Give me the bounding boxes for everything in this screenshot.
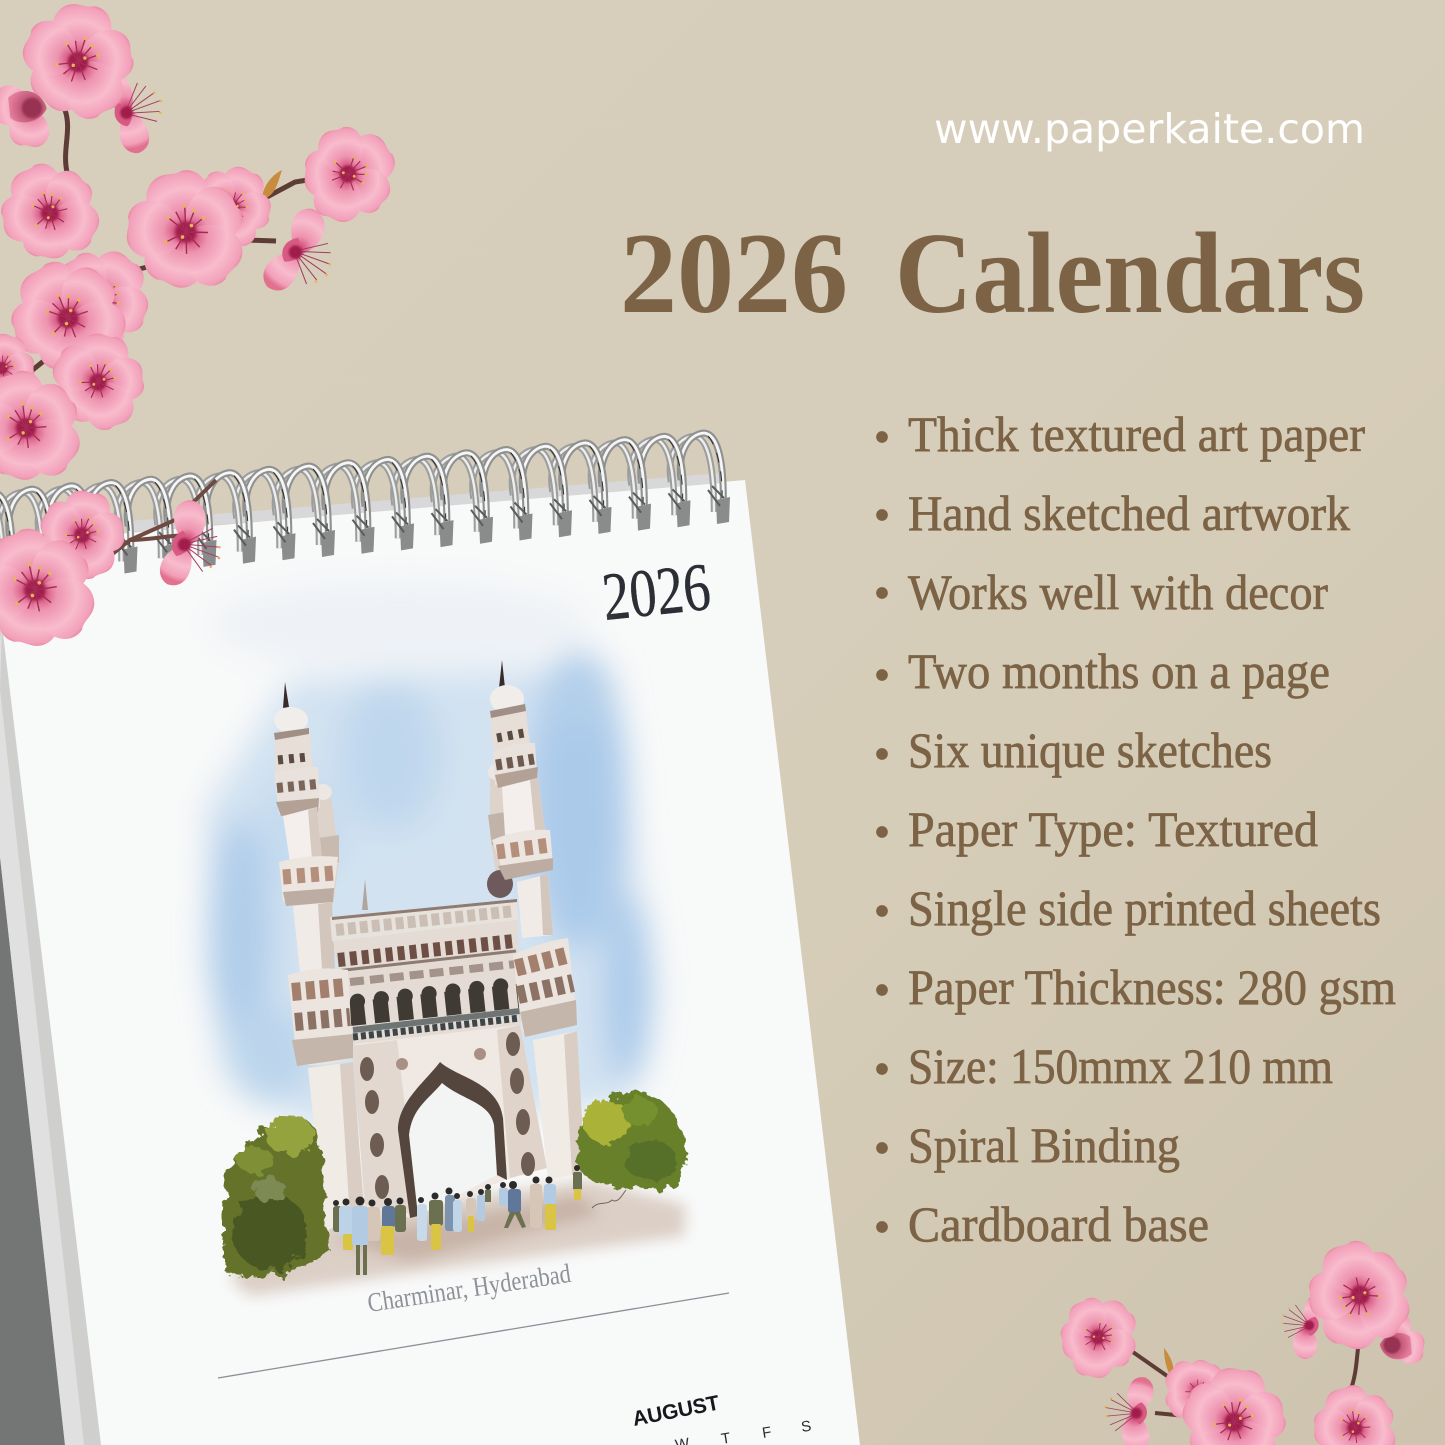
right minaret bbox=[490, 660, 553, 938]
calendar bbox=[0, 433, 860, 1445]
blossom behind bbox=[22, 226, 173, 376]
blossom far right bbox=[277, 105, 415, 243]
ground wash bbox=[228, 1180, 686, 1296]
title: Calendars bbox=[895, 210, 1365, 338]
caption rule bbox=[218, 1293, 729, 1378]
blossom lower side bbox=[1101, 1374, 1155, 1445]
calendar year: 2026 bbox=[599, 548, 714, 635]
illustration: Charminar bbox=[274, 660, 585, 1232]
blossom lower bbox=[34, 322, 159, 445]
weekday labels bbox=[674, 1418, 813, 1445]
feature: artwork: Hand sketched artwork bbox=[908, 485, 1350, 541]
crowd bbox=[333, 1165, 582, 1275]
arch frame bbox=[398, 1062, 507, 1218]
calendar page bbox=[0, 480, 860, 1445]
bud bbox=[1164, 1348, 1174, 1378]
feature: single side: Single side printed sheets bbox=[908, 880, 1381, 936]
right tower bbox=[513, 938, 585, 1180]
blossom middle bbox=[1167, 1359, 1298, 1445]
feature: decor: Works well with decor bbox=[908, 564, 1328, 620]
blossom top bbox=[1289, 1221, 1434, 1365]
person torsos and legs bbox=[333, 1172, 582, 1275]
cherry blossoms: top left branch bbox=[0, 0, 415, 503]
month heading: AUGUST bbox=[631, 1392, 722, 1431]
bud bbox=[262, 170, 282, 197]
feature: paper type: Paper Type: Textured bbox=[908, 801, 1318, 857]
blossom side right bbox=[93, 58, 178, 158]
website address: www.paperkaite.com bbox=[934, 105, 1365, 153]
small dome and finial bbox=[362, 870, 513, 910]
branch bbox=[80, 480, 216, 580]
blossom left bbox=[1036, 1277, 1156, 1398]
blossom large bbox=[0, 511, 117, 675]
calendar base shadow bbox=[0, 857, 65, 1445]
front facade bbox=[352, 1025, 547, 1218]
feature: months: Two months on a page bbox=[908, 643, 1330, 699]
artist signature bbox=[592, 1190, 626, 1208]
person heads bbox=[333, 1165, 580, 1206]
blossom centre bbox=[110, 161, 260, 309]
cherry blossoms: calendar branch bbox=[0, 480, 233, 675]
caption: Charminar, Hyderabad bbox=[365, 1258, 573, 1318]
blossom small side bbox=[156, 497, 233, 596]
watercolor sky bbox=[205, 580, 655, 1130]
branches bbox=[30, 110, 320, 372]
feature: size: Size: 150mmx 210 mm bbox=[908, 1038, 1333, 1094]
weekday labels: S bbox=[800, 1418, 813, 1436]
blossom second bbox=[0, 146, 119, 285]
left minaret bbox=[274, 682, 338, 972]
blossom top bbox=[6, 0, 147, 134]
feature: paper: Thick textured art paper bbox=[908, 406, 1365, 462]
blossom upper bbox=[24, 480, 138, 593]
weekday labels: F bbox=[761, 1424, 773, 1442]
blossom right back bbox=[172, 150, 289, 266]
blossom bottom bbox=[0, 358, 98, 503]
feature list bbox=[876, 406, 1396, 1252]
cherry blossoms: bottom right branch bbox=[1036, 1221, 1434, 1445]
feature: sketches: Six unique sketches bbox=[908, 722, 1272, 778]
left tower bbox=[288, 968, 364, 1232]
blossom dark bbox=[0, 74, 59, 159]
binding strip bbox=[130, 473, 722, 532]
blossom lower side bbox=[258, 203, 353, 310]
arch opening bbox=[409, 1083, 497, 1216]
blossom lower right bbox=[1300, 1376, 1409, 1445]
blossom large left bbox=[0, 238, 151, 403]
blossom upper middle bbox=[1156, 1348, 1241, 1433]
blossom edge bbox=[0, 323, 47, 415]
spiral binding bbox=[0, 433, 730, 583]
title: 2026 bbox=[620, 210, 848, 338]
feature: thickness: Paper Thickness: 280 gsm bbox=[908, 959, 1396, 1015]
blossom dark right bbox=[1369, 1303, 1432, 1373]
blossom side bbox=[1273, 1287, 1330, 1361]
feature: base: Cardboard base bbox=[908, 1196, 1209, 1252]
calendar page stack edge bbox=[0, 625, 101, 1445]
back minarets bbox=[314, 764, 508, 905]
branches bbox=[1130, 1335, 1360, 1416]
title bbox=[620, 210, 1365, 338]
left tree bbox=[222, 1115, 330, 1277]
right tree bbox=[577, 1093, 687, 1189]
feature: binding: Spiral Binding bbox=[908, 1117, 1180, 1173]
central arcade bbox=[330, 899, 520, 1050]
